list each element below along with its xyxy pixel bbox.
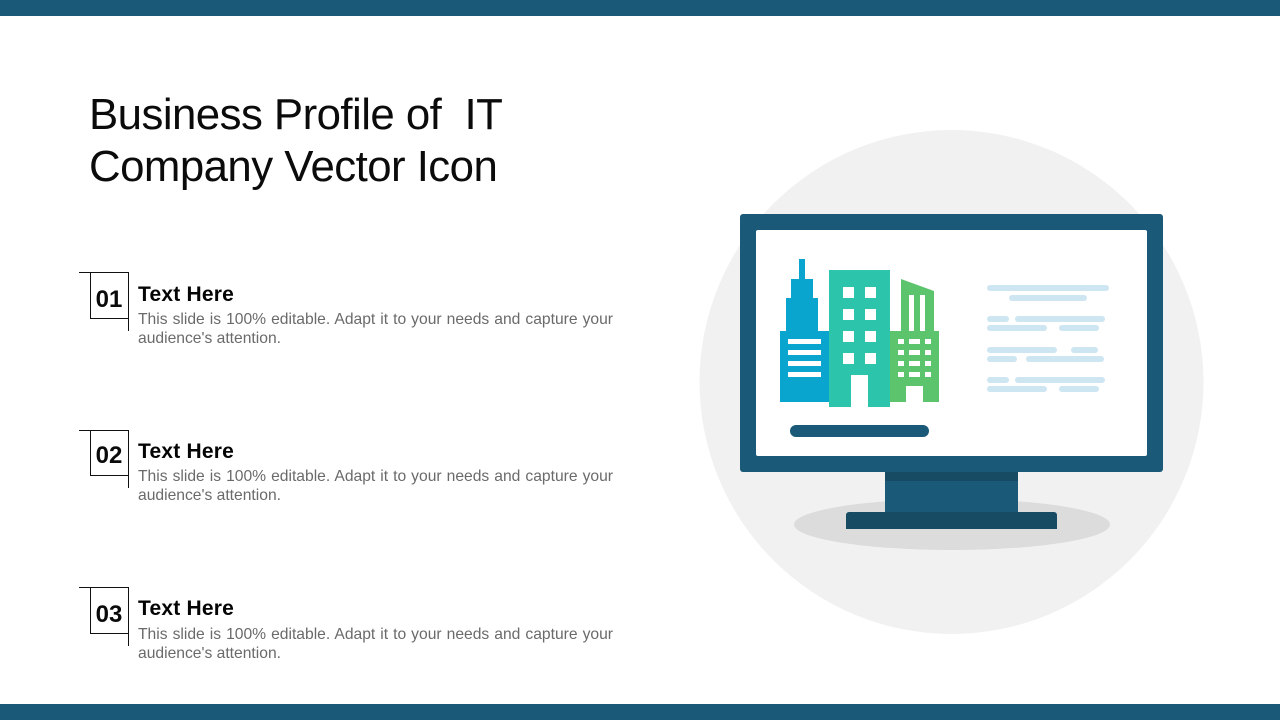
description 01: This slide is 100% editable. Adapt it to your needs and capture your audience's attention. <box>138 311 613 347</box>
description 02: This slide is 100% editable. Adapt it to your needs and capture your audience's attention. <box>138 468 613 504</box>
monitor shadow <box>794 499 1110 550</box>
monitor screen <box>756 230 1147 456</box>
heading 03: Text Here <box>138 597 234 620</box>
list item 02 <box>79 430 613 504</box>
monitor frame <box>740 214 1163 472</box>
icon: green building <box>890 279 939 402</box>
top band <box>0 0 1280 16</box>
caption bar <box>790 425 929 437</box>
heading 01: Text Here <box>138 283 234 306</box>
list item 01 <box>79 272 613 347</box>
placeholder text lines <box>987 285 1109 392</box>
number 02: 02 <box>96 442 122 469</box>
icon: teal building <box>829 270 890 407</box>
number 03: 03 <box>96 601 122 628</box>
background circle <box>700 130 1204 634</box>
heading 02: Text Here <box>138 440 234 463</box>
bottom band <box>0 704 1280 720</box>
monitor stand <box>846 472 1057 529</box>
title: Business Profile of IT Company Vector Icon <box>89 90 502 191</box>
description 03: This slide is 100% editable. Adapt it to your needs and capture your audience's attention. <box>138 626 613 662</box>
list item 03 <box>79 587 613 662</box>
number 01: 01 <box>96 286 122 313</box>
icon: blue tower <box>780 259 829 402</box>
